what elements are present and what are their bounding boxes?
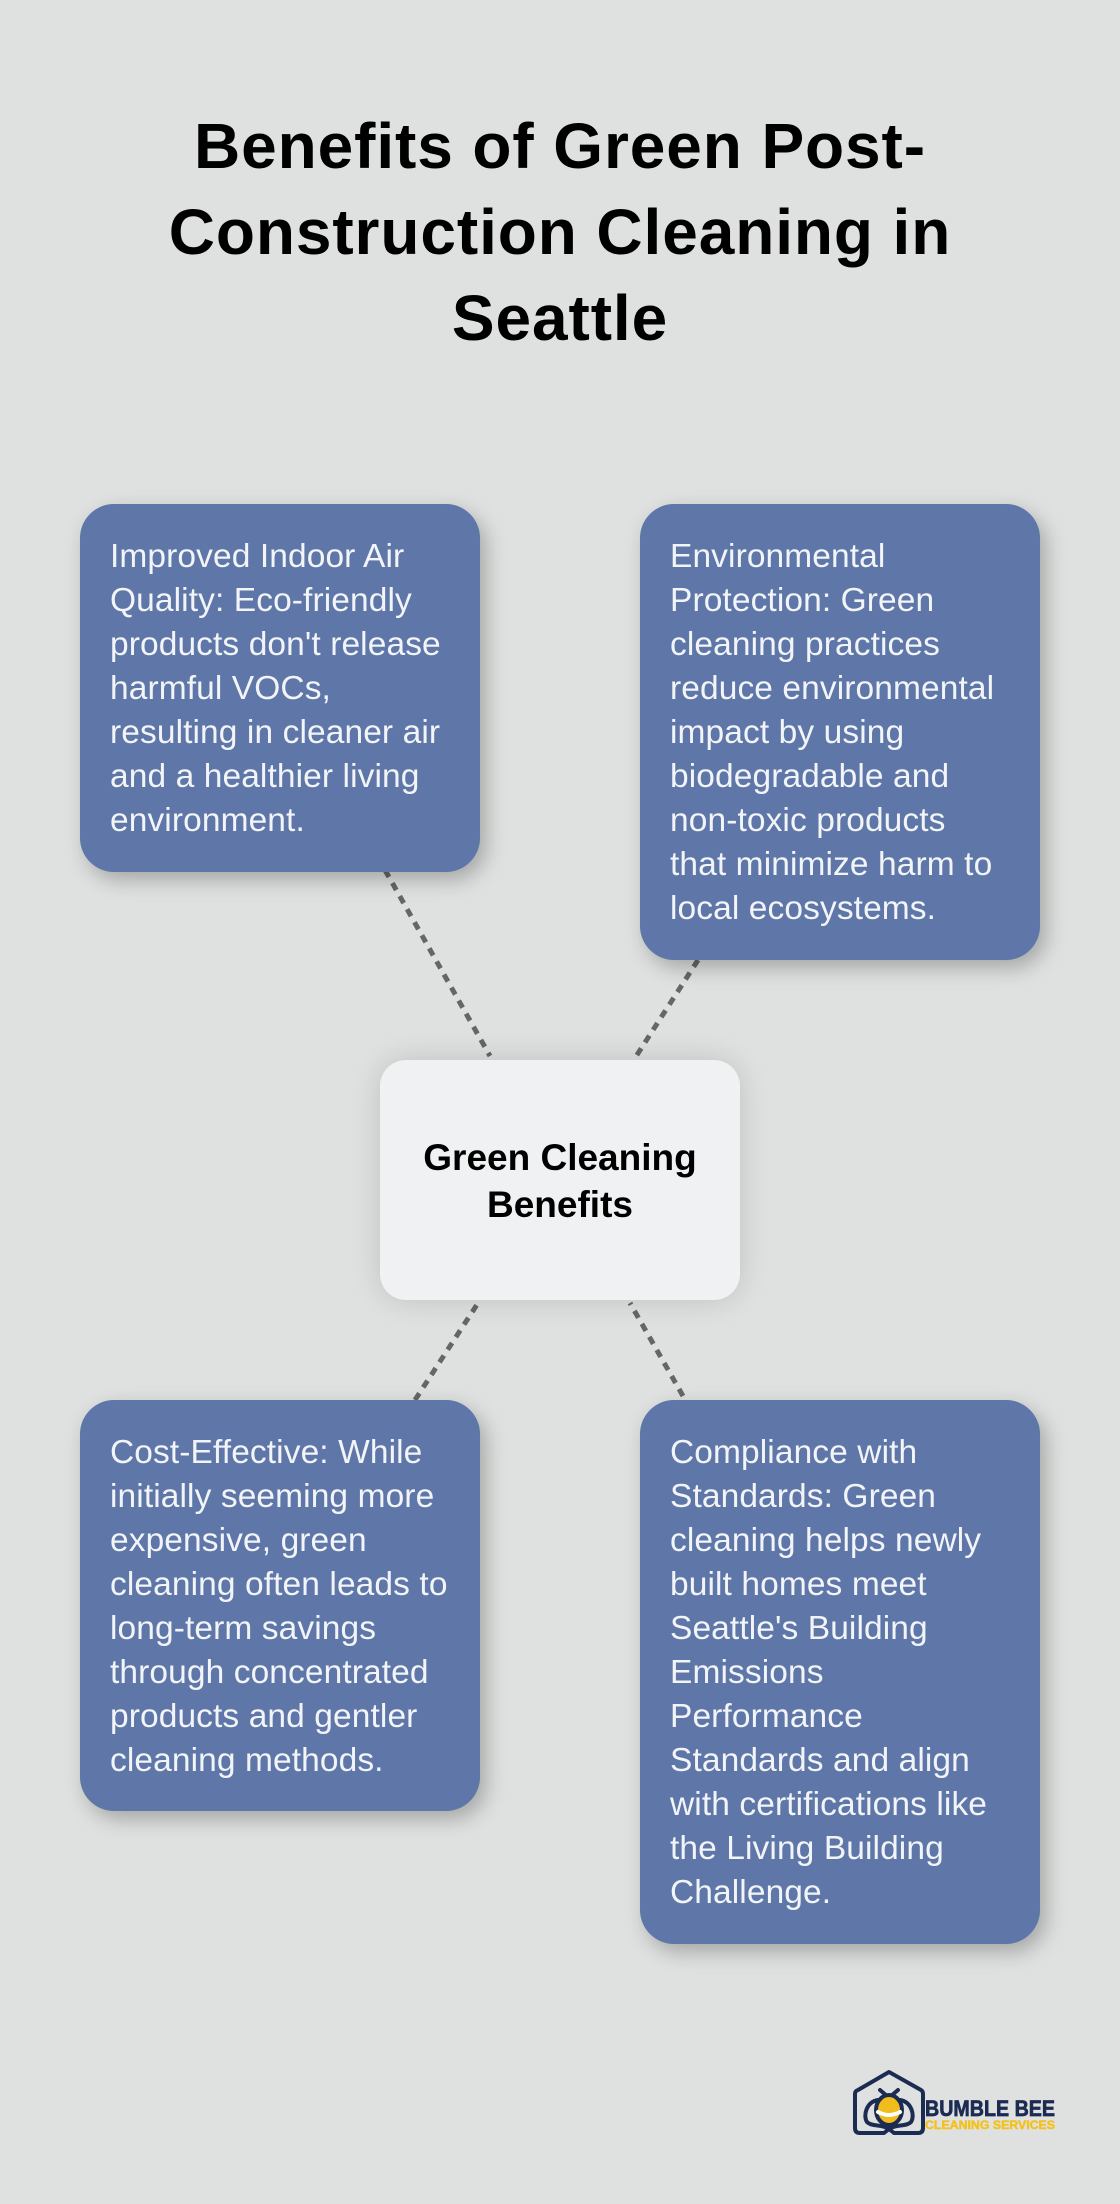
panel: central node: Benefits <box>487 1184 633 1225</box>
panel: cost-effective: expensive, green <box>110 1522 367 1559</box>
panel: compliance with standards <box>640 1400 1040 1944</box>
panel: cost-effective: products and gentler <box>110 1698 417 1735</box>
panel: cost-effective: through concentrated <box>110 1654 429 1691</box>
panel: compliance with standards: Performance <box>670 1698 863 1735</box>
icon: house outline with bee <box>855 2072 923 2133</box>
title: Benefits of Green Post- <box>194 110 926 182</box>
panel: cost-effective <box>80 1400 480 1811</box>
panel: cost-effective: Cost-Effective: While <box>110 1434 422 1471</box>
panel: improved indoor air quality: environment. <box>110 802 305 839</box>
panel: environmental protection: impact by using <box>670 714 904 751</box>
panel: improved indoor air quality: and a healthier living <box>110 758 420 795</box>
title: Seattle <box>452 282 668 354</box>
panel: improved indoor air quality <box>80 504 480 872</box>
panel: compliance with standards: Compliance with <box>670 1434 917 1471</box>
panel: compliance with standards: cleaning helps newly <box>670 1522 981 1559</box>
panel: central node <box>380 1060 740 1300</box>
panel: environmental protection: biodegradable and <box>670 758 949 795</box>
panel: cost-effective: initially seeming more <box>110 1478 434 1515</box>
logo: Bumble Bee Cleaning Services <box>853 2070 1055 2135</box>
panel: environmental protection: Environmental <box>670 538 885 575</box>
panel: compliance with standards: Seattle's Building <box>670 1610 928 1647</box>
panel: environmental protection: cleaning practices <box>670 626 940 663</box>
panel: environmental protection: that minimize harm to <box>670 846 992 883</box>
panel: central node: Green Cleaning <box>423 1137 697 1178</box>
panel: compliance with standards: with certifications like <box>670 1786 987 1823</box>
panel: improved indoor air quality: Quality: Eco-friendly <box>110 582 412 619</box>
panel: improved indoor air quality: products don't release <box>110 626 441 663</box>
panel: cost-effective: cleaning methods. <box>110 1742 384 1779</box>
panel: environmental protection: reduce environmental <box>670 670 994 707</box>
panel: environmental protection: non-toxic products <box>670 802 946 839</box>
panel: compliance with standards: Standards and align <box>670 1742 970 1779</box>
panel: cost-effective: cleaning often leads to <box>110 1566 448 1603</box>
title: Construction Cleaning in <box>169 196 951 268</box>
panel: compliance with standards: built homes meet <box>670 1566 927 1603</box>
panel: compliance with standards: Challenge. <box>670 1874 831 1911</box>
panel: compliance with standards: Emissions <box>670 1654 824 1691</box>
panel: environmental protection: Protection: Green <box>670 582 934 619</box>
panel: compliance with standards: the Living Building <box>670 1830 944 1867</box>
panel: improved indoor air quality: resulting in cleaner air <box>110 714 440 751</box>
panel: environmental protection: local ecosystems. <box>670 890 936 927</box>
panel: improved indoor air quality: Improved Indoor Air <box>110 538 404 575</box>
panel: environmental protection <box>640 504 1040 960</box>
panel: improved indoor air quality: harmful VOCs, <box>110 670 331 707</box>
panel: cost-effective: long-term savings <box>110 1610 376 1647</box>
title <box>169 110 951 354</box>
text: brand tagline: CLEANING SERVICES <box>925 2118 1055 2132</box>
panel: compliance with standards: Standards: Green <box>670 1478 936 1515</box>
